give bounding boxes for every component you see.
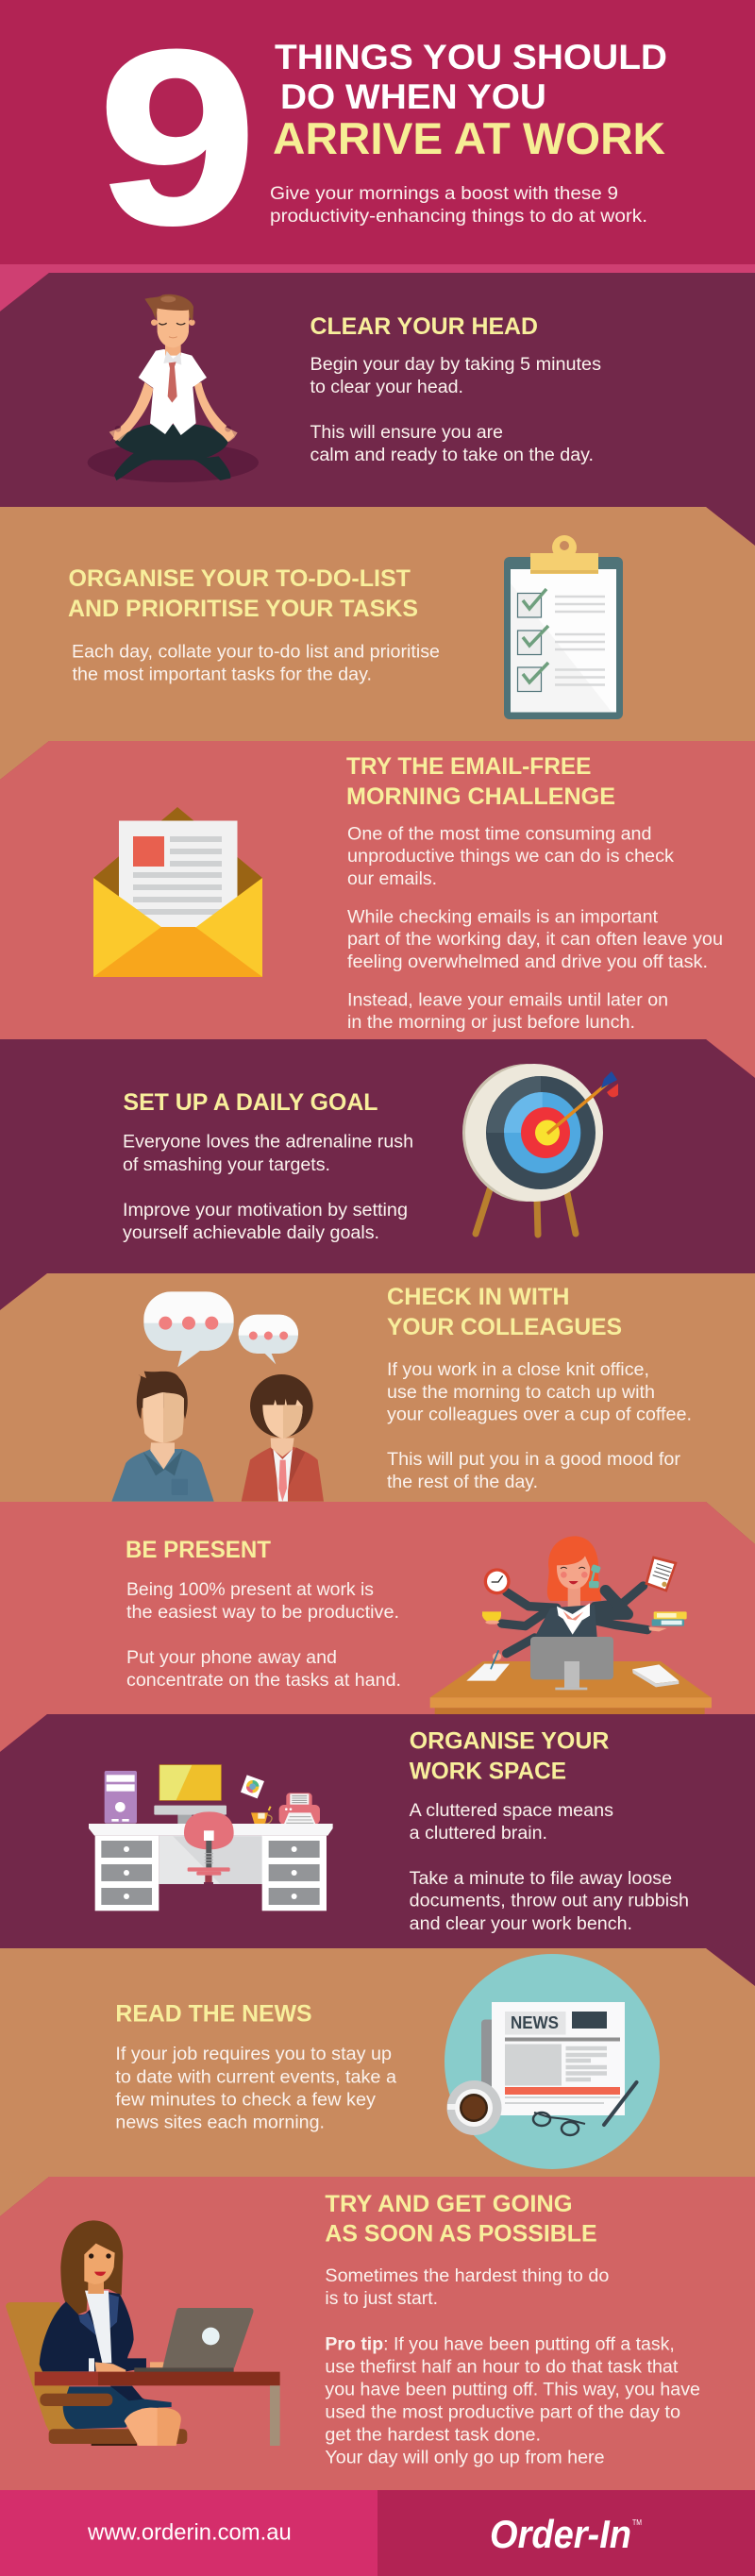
body text: and clear your work bench. — [410, 1914, 632, 1934]
heading: ORGANISE YOUR TO-DO-LIST — [68, 565, 411, 592]
heading: CHECK IN WITH — [387, 1284, 570, 1310]
body text: used the most productive part of the day to — [325, 2403, 680, 2422]
big number 9: 9 — [98, 0, 257, 276]
icon: woman working on laptop — [6, 2220, 280, 2446]
body text: yourself achievable daily goals. — [123, 1223, 379, 1243]
body text: in the morning or just before lunch. — [347, 1013, 635, 1033]
body text: to clear your head. — [310, 378, 463, 397]
heading: MORNING CHALLENGE — [346, 783, 615, 810]
section background — [0, 1273, 755, 1544]
body text: Your day will only go up from here — [325, 2449, 605, 2467]
section background — [0, 1502, 755, 1752]
body text: documents, throw out any rubbish — [410, 1892, 689, 1911]
heading — [325, 2191, 597, 2247]
section background — [0, 1039, 755, 1310]
body text: to date with current events, take a — [115, 2067, 396, 2088]
panel: header — [0, 0, 755, 311]
heading: TRY AND GET GOING — [325, 2191, 573, 2217]
body text: calm and ready to take on the day. — [310, 446, 594, 465]
body text: the rest of the day. — [387, 1473, 538, 1492]
heading: TRY THE EMAIL-FREE — [346, 753, 591, 780]
brand logo: Order-In — [490, 2512, 631, 2556]
heading: YOUR COLLEAGUES — [387, 1314, 622, 1340]
heading: WORK SPACE — [410, 1758, 566, 1784]
body text: a cluttered brain. — [410, 1824, 547, 1844]
body text — [72, 642, 440, 685]
heading: AS SOON AS POSSIBLE — [325, 2220, 597, 2247]
section background — [0, 1948, 755, 2216]
body text: Begin your day by taking 5 minutes — [310, 355, 601, 375]
panel: get going as soon as possible — [0, 2177, 755, 2490]
body text: While checking emails is an important — [347, 908, 659, 927]
section background — [0, 741, 755, 1078]
body text: Being 100% present at work is — [126, 1580, 374, 1600]
body text: Each day, collate your to-do list and prioritise — [72, 642, 440, 663]
body text: This will ensure you are — [310, 423, 503, 443]
section background — [0, 1714, 755, 1986]
body text: If your job requires you to stay up — [115, 2045, 392, 2064]
body text — [410, 1801, 689, 1934]
section background — [0, 507, 755, 780]
body text: Everyone loves the adrenaline rush — [123, 1133, 413, 1152]
panel: footer — [0, 2490, 755, 2576]
section background — [0, 273, 755, 546]
body text — [310, 355, 601, 465]
body text — [115, 2045, 396, 2133]
heading: SET UP A DAILY GOAL — [123, 1089, 378, 1116]
heading: AND PRIORITISE YOUR TASKS — [68, 596, 418, 622]
body text: the easiest way to be productive. — [126, 1603, 399, 1623]
body text: of smashing your targets. — [123, 1155, 330, 1175]
body text: If you work in a close knit office, — [387, 1360, 649, 1380]
heading — [346, 753, 615, 810]
body text: This will put you in a good mood for — [387, 1450, 681, 1470]
body text: Put your phone away and — [126, 1648, 337, 1668]
panel: be present — [0, 1502, 755, 1752]
body text — [126, 1580, 401, 1691]
title — [273, 38, 667, 163]
panel: clear your head — [0, 273, 755, 546]
footer right background — [378, 2490, 755, 2576]
panel: read the news — [0, 1948, 755, 2216]
body text: use the morning to catch up with — [387, 1383, 655, 1403]
body text: Instead, leave your emails until later on — [347, 991, 668, 1010]
body text: unproductive things we can do is check — [347, 847, 675, 867]
icon: archery target — [462, 1064, 618, 1235]
body text: Pro tip: If you have been putting off a task, — [325, 2335, 675, 2354]
icon: open envelope — [93, 807, 262, 977]
body text: the most important tasks for the day. — [72, 665, 372, 685]
website url: www.orderin.com.au — [87, 2520, 292, 2545]
title: THINGS YOU SHOULD — [275, 38, 667, 76]
heading — [387, 1284, 622, 1340]
brand logo: TM — [632, 2518, 642, 2527]
icon: meditating man — [88, 295, 259, 482]
body text: One of the most time consuming and — [347, 825, 651, 844]
header background — [0, 0, 755, 264]
body text: Take a minute to file away loose — [410, 1869, 672, 1889]
body text: is to just start. — [325, 2289, 438, 2309]
section background — [0, 2177, 755, 2490]
body text: you have been putting off. This way, you have — [325, 2381, 700, 2399]
icon: multitasking woman at desk — [430, 1536, 712, 1715]
panel: check in with your colleagues — [0, 1273, 755, 1544]
body text: get the hardest task done. — [325, 2426, 541, 2445]
icon: newspaper, coffee and glasses — [445, 1954, 660, 2169]
heading — [68, 565, 418, 622]
title: ARRIVE AT WORK — [273, 113, 665, 163]
intro text: productivity-enhancing things to do at work. — [270, 207, 647, 227]
header accent band — [0, 264, 755, 311]
body text: feeling overwhelmed and drive you off task. — [347, 952, 708, 972]
intro text — [270, 184, 647, 227]
body text: your colleagues over a cup of coffee. — [387, 1405, 692, 1425]
panel: set up a daily goal — [0, 1039, 755, 1310]
icon: clipboard checklist — [504, 535, 623, 719]
newspaper masthead: NEWS — [511, 2013, 559, 2032]
body text: use thefirst half an hour to do that task that — [325, 2358, 679, 2377]
heading: BE PRESENT — [126, 1537, 271, 1563]
icon: tidy office desk — [89, 1764, 333, 1911]
body text — [325, 2266, 700, 2467]
icon: two colleagues with speech bubbles — [111, 1291, 324, 1502]
body text: news sites each morning. — [115, 2113, 325, 2133]
footer left background — [0, 2490, 378, 2576]
panel: email-free morning — [0, 741, 755, 1078]
heading: ORGANISE YOUR — [410, 1727, 609, 1754]
body text — [123, 1133, 413, 1243]
body text — [347, 825, 723, 1033]
heading: CLEAR YOUR HEAD — [310, 313, 538, 340]
body text: A cluttered space means — [410, 1801, 613, 1821]
body text: our emails. — [347, 869, 437, 889]
body text: Sometimes the hardest thing to do — [325, 2266, 609, 2286]
body text: Improve your motivation by setting — [123, 1201, 408, 1221]
body text — [387, 1360, 692, 1492]
body text: concentrate on the tasks at hand. — [126, 1671, 401, 1691]
body text: part of the working day, it can often leave you — [347, 930, 723, 950]
title: DO WHEN YOU — [280, 77, 546, 116]
panel: organise your work space — [0, 1714, 755, 1986]
heading — [410, 1727, 609, 1784]
heading: READ THE NEWS — [115, 2001, 312, 2028]
intro text: Give your mornings a boost with these 9 — [270, 184, 618, 204]
panel: organise your to-do list — [0, 507, 755, 780]
body text: few minutes to check a few key — [115, 2090, 377, 2111]
